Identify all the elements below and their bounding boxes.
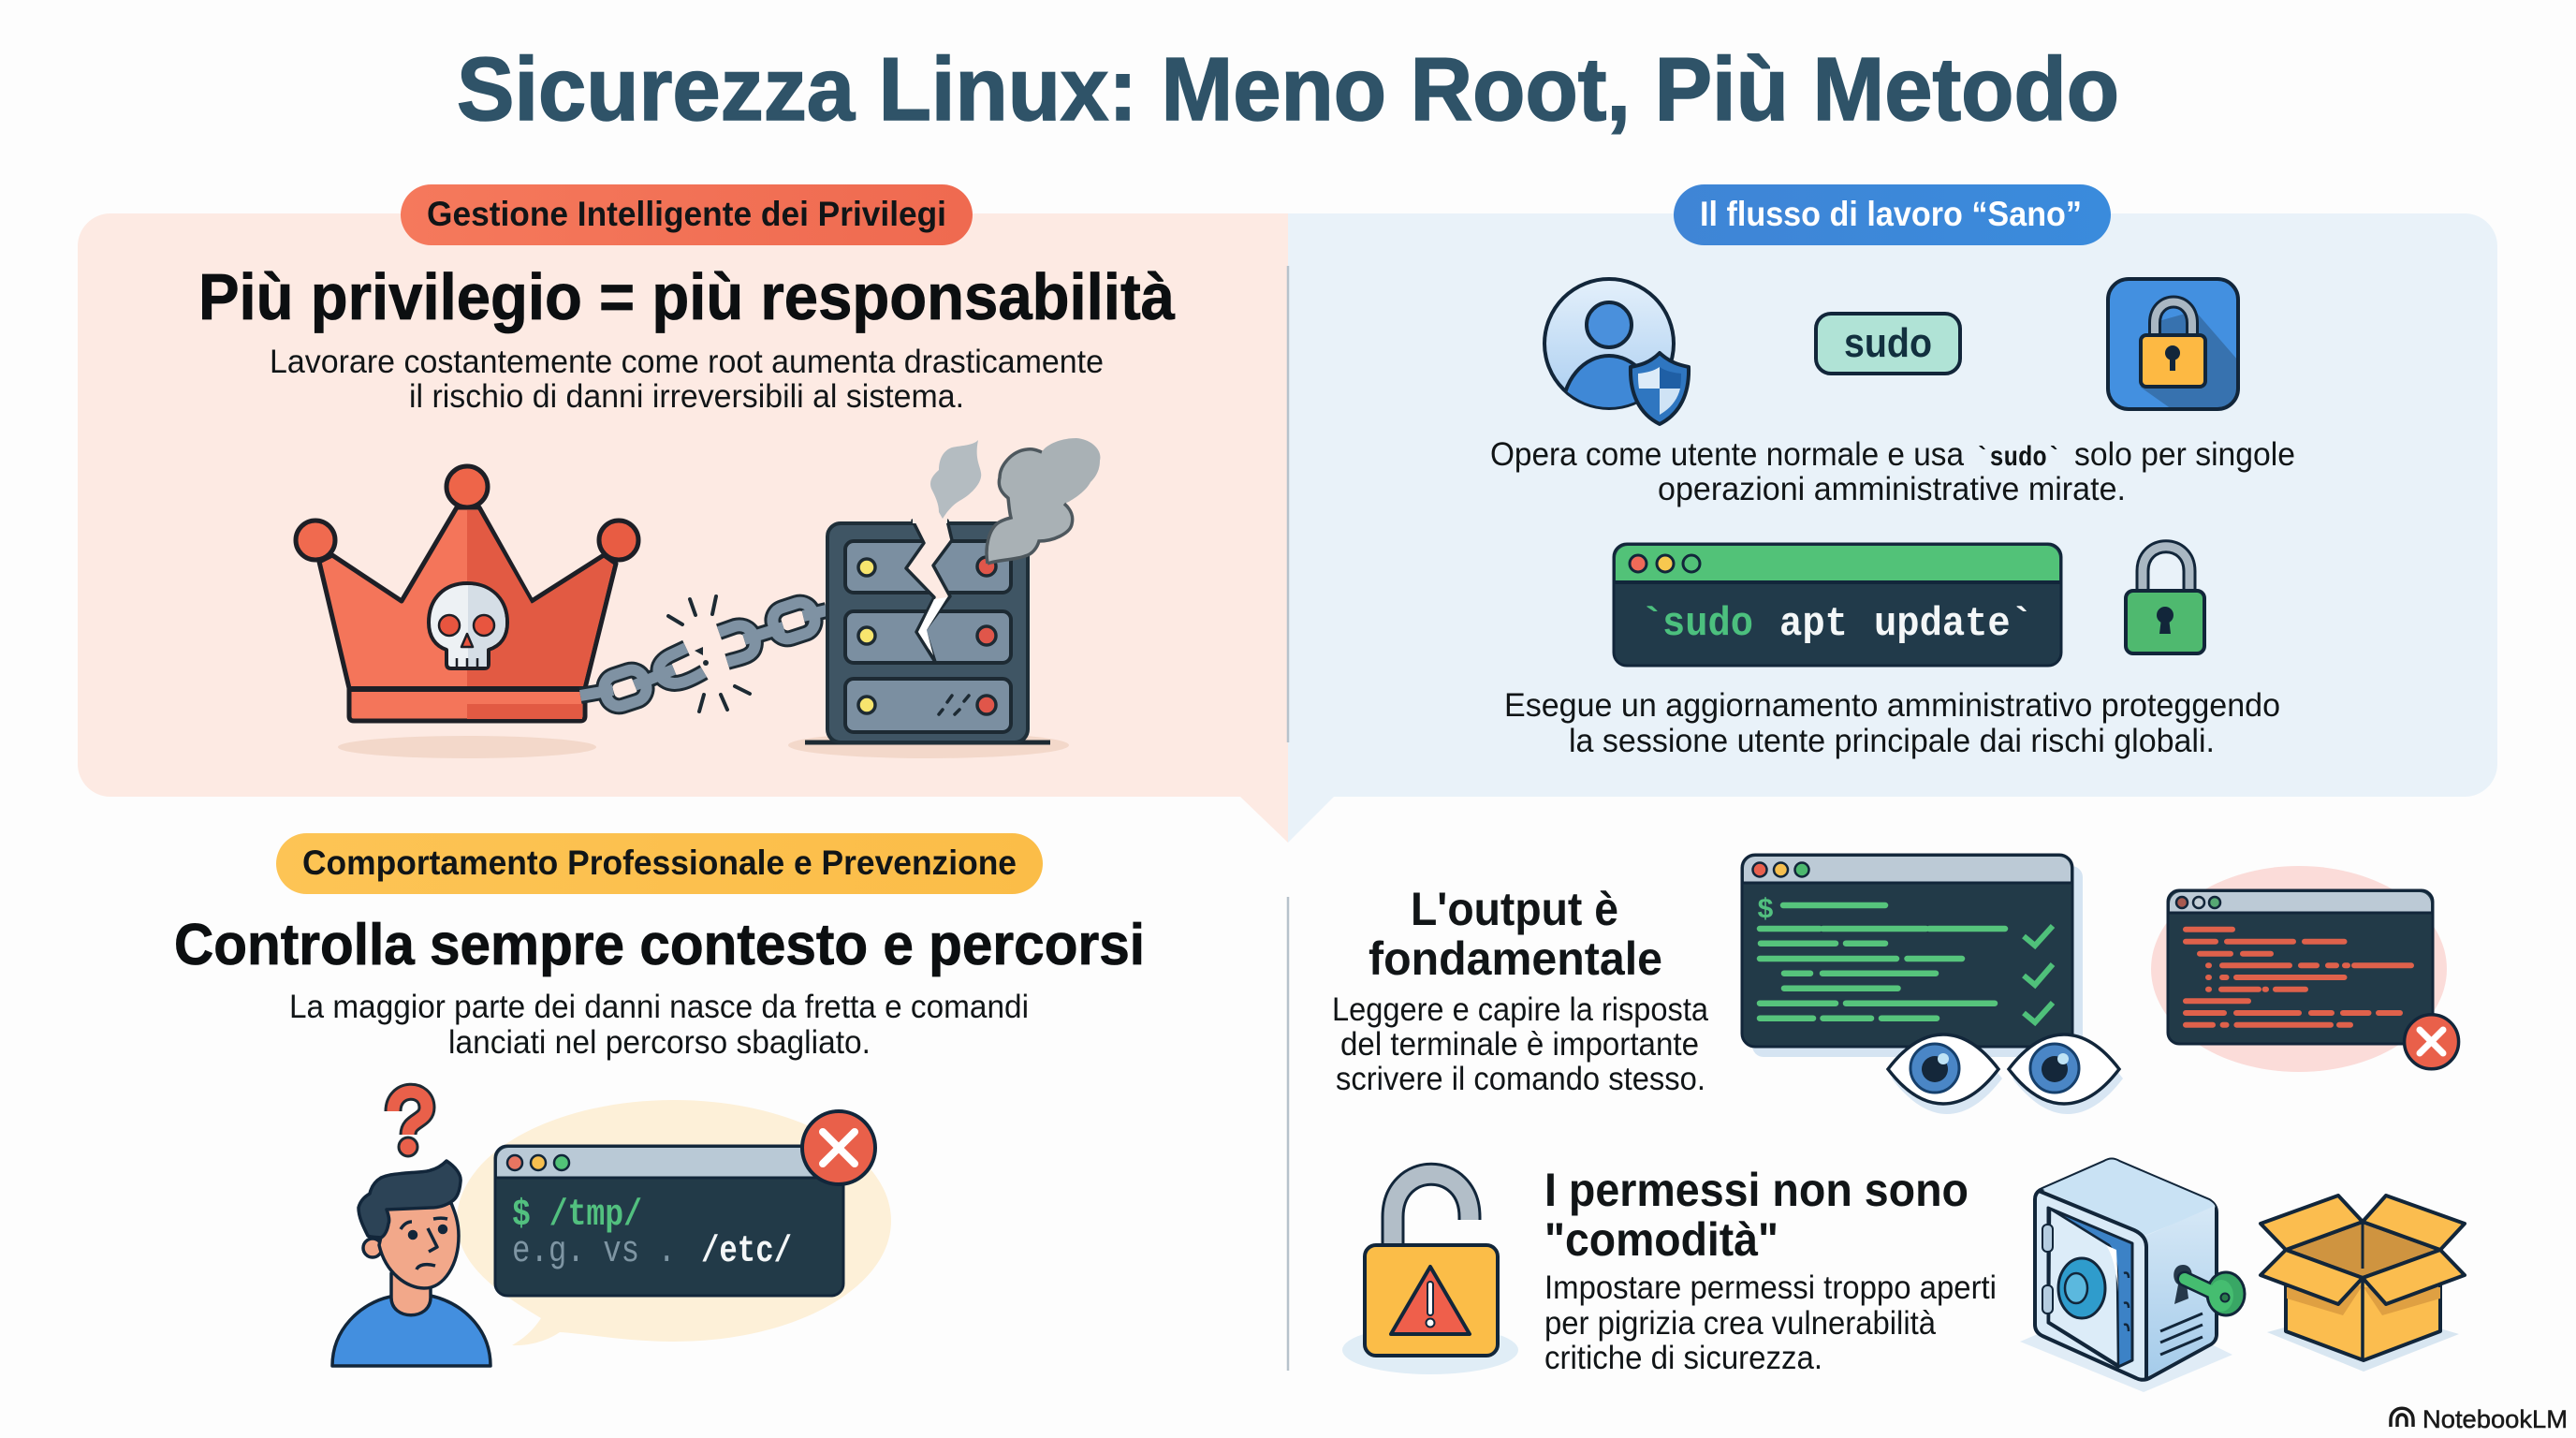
terminal: sudo apt update: update` <box>1874 601 2033 648</box>
pill: healthy workflow <box>1674 184 2111 245</box>
center divider top <box>1287 266 1289 742</box>
icon: green lock <box>2126 547 2204 653</box>
terminal: wrong path: /etc/ <box>701 1231 792 1273</box>
text: normal user explanation: operazioni amministrative mirate. <box>1658 471 2126 507</box>
text: output: scrivere il comando stesso. <box>1336 1061 1705 1097</box>
text: normal user explanation: Opera come utente normale e usa <box>1490 436 1965 473</box>
pill: healthy workflow: Il flusso di lavoro “Sano” <box>1700 195 2082 233</box>
icon: cracked server with smoke <box>788 438 1100 758</box>
icon: confused person <box>332 1161 490 1366</box>
heading: context: Controlla sempre contesto e percorsi <box>174 913 1145 977</box>
heading: output <box>1368 883 1662 985</box>
icon: error badge <box>802 1111 875 1184</box>
icon: open safe with key <box>2020 1159 2245 1392</box>
text: haste <box>289 989 1029 1061</box>
terminal: wrong path: e.g. vs . <box>512 1231 676 1273</box>
pill: privilege management: Gestione Intelligente dei Privilegi <box>427 195 946 233</box>
heading: privilege: Più privilegio = più responsabilità <box>198 260 1176 333</box>
icon: question mark <box>393 1092 427 1156</box>
pill: privilege management <box>401 184 973 245</box>
icon: lock tile <box>2108 279 2238 409</box>
badge: sudo: sudo <box>1844 320 1932 366</box>
heading: output: fondamentale <box>1368 932 1662 985</box>
text: permissions: per pigrizia crea vulnerabilità <box>1544 1305 1936 1342</box>
text: session protection <box>1504 687 2280 759</box>
icon: open lock with warning <box>1342 1174 1518 1374</box>
text: output <box>1332 991 1708 1097</box>
logo: NotebookLM: NotebookLM <box>2422 1405 2568 1433</box>
panel background: salmon <box>78 213 1288 843</box>
panel: healthy workflow <box>1288 184 2497 843</box>
icon: broken chain <box>580 596 827 712</box>
icon: open cardboard box <box>2261 1196 2465 1372</box>
center divider bottom <box>1287 897 1289 1371</box>
terminal: wrong path: $ /tmp/ <box>512 1195 642 1237</box>
text: haste: La maggior parte dei danni nasce da fretta e comandi <box>289 989 1029 1025</box>
terminal: sudo apt update: sudo <box>1662 601 1753 648</box>
terminal: sudo apt update: ` <box>1640 601 1664 648</box>
terminal: sudo apt update: apt <box>1779 601 1848 648</box>
panel: privilege management <box>78 184 1288 843</box>
heading: output: L'output è <box>1411 883 1618 935</box>
icon: speech bubble <box>457 1100 891 1345</box>
panel background: light blue <box>1288 213 2497 843</box>
badge: sudo <box>1816 314 1960 374</box>
text: session protection: la sessione utente principale dai rischi globali. <box>1569 723 2215 759</box>
panel: professional behaviour <box>174 833 1145 1366</box>
text: normal user explanation: solo per singole <box>2074 436 2295 473</box>
text: root risk: Lavorare costantemente come root aumenta drasticamente <box>270 344 1104 380</box>
text: output: del terminale è importante <box>1340 1026 1699 1063</box>
text: root risk: il rischio di danni irreversibili al sistema. <box>409 378 964 415</box>
heading: permissions <box>1544 1164 1969 1266</box>
panel: output and permissions <box>1332 855 2465 1392</box>
terminal: sudo apt update <box>1614 544 2061 666</box>
text: session protection: Esegue un aggiornamento amministrativo proteggendo <box>1504 687 2280 724</box>
title: Sicurezza Linux: Meno Root, Più Metodo <box>457 39 2119 139</box>
text: root risk <box>270 344 1104 415</box>
terminal: error output <box>2151 866 2459 1072</box>
icon: crown with skull <box>296 466 638 758</box>
text: permissions: critiche di sicurezza. <box>1544 1340 1822 1376</box>
terminal: good output <box>1742 855 2083 1057</box>
icon: eyes <box>1888 1034 2123 1114</box>
text: permissions <box>1544 1269 1997 1376</box>
pill: professional behaviour: Comportamento Professionale e Prevenzione <box>302 844 1017 882</box>
pill: professional behaviour <box>276 833 1043 894</box>
text: output: Leggere e capire la risposta <box>1332 991 1708 1028</box>
heading: permissions: I permessi non sono <box>1544 1164 1969 1216</box>
terminal: wrong path <box>495 1146 843 1296</box>
terminal: good output: $ <box>1757 895 1774 927</box>
heading: permissions: "comodità" <box>1544 1213 1778 1266</box>
icon: user with shield <box>1543 277 1690 426</box>
text: normal user explanation: `sudo` <box>1975 443 2061 475</box>
text: normal user explanation <box>1490 436 2295 507</box>
text: haste: lanciati nel percorso sbagliato. <box>448 1024 871 1061</box>
text: permissions: Impostare permessi troppo aperti <box>1544 1269 1997 1306</box>
